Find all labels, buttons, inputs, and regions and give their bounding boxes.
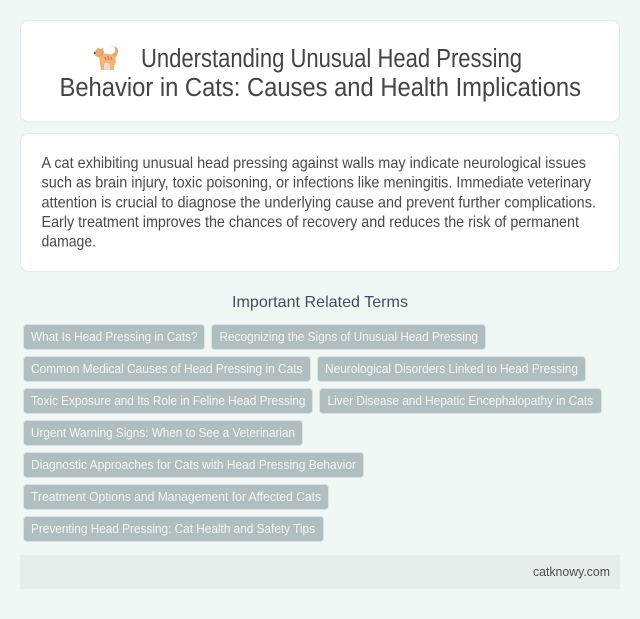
tag: preventing head pressing xyxy=(24,516,324,542)
summary text xyxy=(42,155,596,250)
tag: diagnostic approaches: Diagnostic Approaches for Cats with Head Pressing Behavior xyxy=(31,458,356,472)
tag: what is head pressing xyxy=(24,324,204,350)
summary text: Early treatment improves the chances of recovery and reduces the risk of permanent xyxy=(42,214,580,231)
title text xyxy=(60,45,581,102)
tag: what is head pressing: What Is Head Pressing in Cats? xyxy=(31,330,198,344)
tag: treatment options xyxy=(24,484,328,510)
tag: liver disease: Liver Disease and Hepatic Encephalopathy in Cats xyxy=(328,394,593,408)
tag: urgent warning signs xyxy=(24,420,302,446)
heading: important related terms: Important Related Terms xyxy=(232,294,408,311)
tag: common medical causes xyxy=(24,356,310,382)
panel: title card xyxy=(20,20,620,122)
title text: Behavior in Cats: Causes and Health Implications xyxy=(60,74,581,102)
summary text: such as brain injury, toxic poisoning, or infections like meningitis. Immediate veterinary xyxy=(42,175,591,192)
tag: preventing head pressing: Preventing Head Pressing: Cat Health and Safety Tips xyxy=(31,522,315,536)
icon: orange cat xyxy=(94,46,118,70)
tag: treatment options: Treatment Options and Management for Affected Cats xyxy=(31,490,321,504)
panel: summary card xyxy=(20,134,620,272)
summary text: attention is crucial to diagnose the underlying cause and prevent further complications. xyxy=(42,194,596,212)
tag: recognizing the signs xyxy=(212,324,486,350)
footer: catknowy.com xyxy=(533,565,610,579)
title text: Understanding Unusual Head Pressing xyxy=(141,45,522,73)
footer xyxy=(20,555,620,589)
tag: toxic exposure xyxy=(24,388,312,414)
summary text: A cat exhibiting unusual head pressing against walls may indicate neurological issues xyxy=(42,155,586,172)
tag: common medical causes: Common Medical Causes of Head Pressing in Cats xyxy=(31,362,302,376)
tag: recognizing the signs: Recognizing the Signs of Unusual Head Pressing xyxy=(220,330,478,344)
tag: diagnostic approaches xyxy=(24,452,364,478)
tag: toxic exposure: Toxic Exposure and Its Role in Feline Head Pressing xyxy=(31,394,306,408)
tag: neurological disorders: Neurological Disorders Linked to Head Pressing xyxy=(325,362,578,376)
tag: urgent warning signs: Urgent Warning Signs: When to See a Veterinarian xyxy=(31,426,295,440)
tag list xyxy=(24,324,602,542)
tag: liver disease xyxy=(320,388,602,414)
tag: neurological disorders xyxy=(318,356,586,382)
summary text: damage. xyxy=(42,234,96,250)
